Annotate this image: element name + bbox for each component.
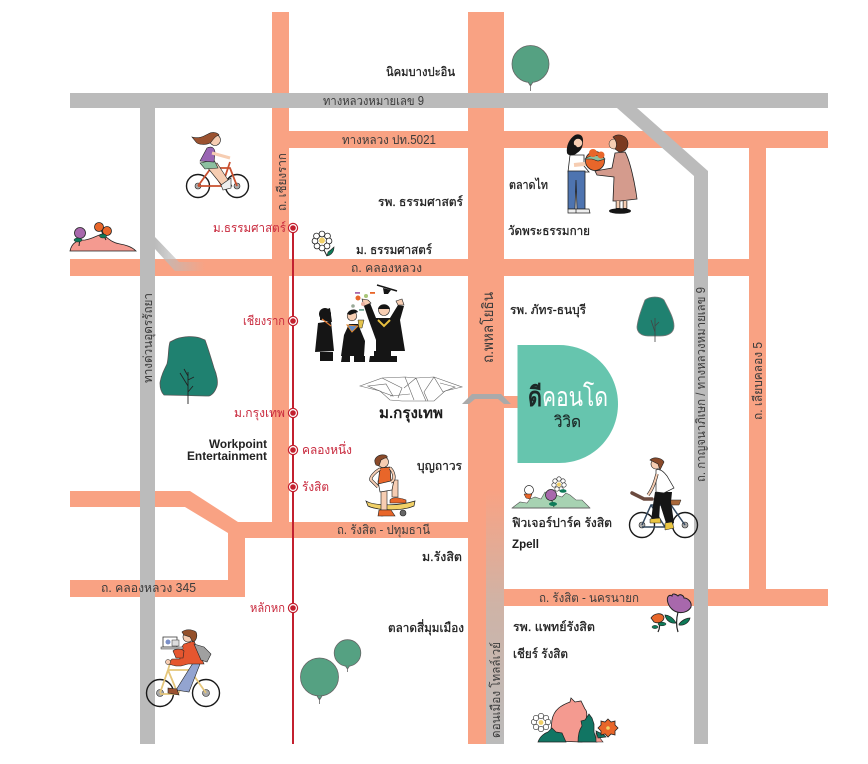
icon: daisy: [312, 231, 334, 256]
station: รังสิต: รังสิต: [302, 480, 329, 494]
place labels: Workpoint: [209, 439, 267, 451]
road labels: ทางหลวง ปท.5021: [342, 133, 436, 147]
orange road: รังสิต-นครนายก: [500, 589, 828, 606]
place labels: ตลาดสี่มุมเมือง: [388, 619, 464, 636]
place labels: วัดพระธรรมกาย: [508, 224, 590, 238]
icon: round tree top: [512, 46, 549, 91]
red rail line: [292, 230, 294, 744]
place labels: ม.กรุงเทพ: [379, 405, 443, 423]
road labels: ทางด่วนอุดรรัถยา: [141, 293, 156, 383]
place labels: Entertainment: [187, 451, 267, 463]
road labels: ถ.พหลโยธิน: [479, 292, 497, 363]
station: ม.ธรรมศาสตร์: ม.ธรรมศาสตร์: [213, 221, 286, 235]
road labels: [101, 94, 765, 738]
project logo: D Condo Vivid: ดี: [528, 382, 542, 412]
orange road: รังสิต-ปทุมธานี and คลองหลวง 345: [70, 491, 470, 597]
road labels: ถ. รังสิต - ปทุมธานี: [337, 523, 430, 538]
place labels: [187, 65, 612, 661]
station: คลองหนึ่ง: [288, 441, 352, 457]
place labels: รพ. ธรรมศาสตร์: [378, 195, 463, 209]
station: เชียงราก: เชียงราก: [243, 314, 285, 328]
road labels: ถ. เชียงราก: [275, 153, 289, 211]
place labels: รพ. ภัทร-ธนบุรี: [510, 303, 586, 318]
station: คลองหนึ่ง: คลองหนึ่ง: [302, 441, 352, 457]
road labels: ถ. กาญจนาภิเษก / ทางหลวงหมายเลข 9: [694, 287, 708, 482]
icon: man on bicycle: [630, 458, 698, 538]
orange road: ปท.5021: [289, 131, 828, 148]
icon: graduates: [315, 285, 405, 362]
icon: skateboarder: [366, 455, 415, 516]
icon: big bush: [160, 337, 217, 404]
place labels: บุญถาวร: [417, 459, 462, 474]
icon: hill with flowers left: [70, 222, 136, 251]
place labels: ม.รังสิต: [422, 550, 462, 564]
icon: bottom bush with flowers: [531, 698, 618, 742]
icon: round tree small: [334, 640, 361, 672]
icon: two women at market: [567, 134, 637, 214]
icon: student on bicycle with laptop: [146, 630, 220, 706]
orange road: เลียบคลอง 5: [749, 148, 766, 593]
project logo: D Condo Vivid: [518, 345, 618, 463]
station: ม.กรุงเทพ: ม.กรุงเทพ: [234, 406, 285, 421]
road labels: ถ. รังสิต - นครนายก: [539, 591, 639, 605]
place labels: Zpell: [512, 537, 539, 551]
overpass road fill: [468, 404, 504, 408]
station: รังสิต: [288, 480, 329, 494]
station: หลักหก: หลักหก: [250, 601, 285, 615]
place labels: นิคมบางปะอิน: [386, 65, 455, 79]
project logo: D Condo Vivid: คอนโด: [542, 382, 608, 412]
tollway gradient: [486, 490, 504, 744]
gray road: ทางหลวงหมายเลข 9: [70, 93, 828, 744]
place labels: เชียร์ รังสิต: [513, 647, 568, 661]
project logo: D Condo Vivid: วิวิด: [554, 414, 581, 431]
icon: Bangkok University building: [360, 377, 462, 401]
icon: flower mound: [512, 477, 590, 508]
road labels: ดอนเมือง โทลล์เวย์: [488, 642, 503, 738]
place labels: ตลาดไท: [509, 178, 548, 192]
gray ramp: [155, 237, 205, 271]
road labels: ทางหลวงหมายเลข 9: [323, 94, 424, 108]
road labels: ถ. คลองหลวง 345: [101, 581, 196, 595]
orange road: พหลโยธิน: [468, 12, 504, 744]
overpass: [462, 394, 511, 404]
place labels: ฟิวเจอร์ปาร์ค รังสิต: [512, 516, 612, 530]
place labels: ม. ธรรมศาสตร์: [356, 243, 432, 257]
connector to project: [504, 396, 520, 408]
icon: purple and orange flowers: [651, 594, 691, 632]
icon: small bush: [637, 297, 674, 342]
icon: round tree large: [300, 658, 338, 704]
road labels: ถ. คลองหลวง: [351, 261, 422, 275]
icon: girl on bicycle: [186, 132, 248, 198]
place labels: รพ. แพทย์รังสิต: [513, 620, 595, 634]
orange road: ถ. เชียงราก: [272, 12, 289, 524]
road labels: ถ. เลียบคลอง 5: [751, 342, 765, 420]
orange road: คลองหลวง: [70, 259, 766, 276]
